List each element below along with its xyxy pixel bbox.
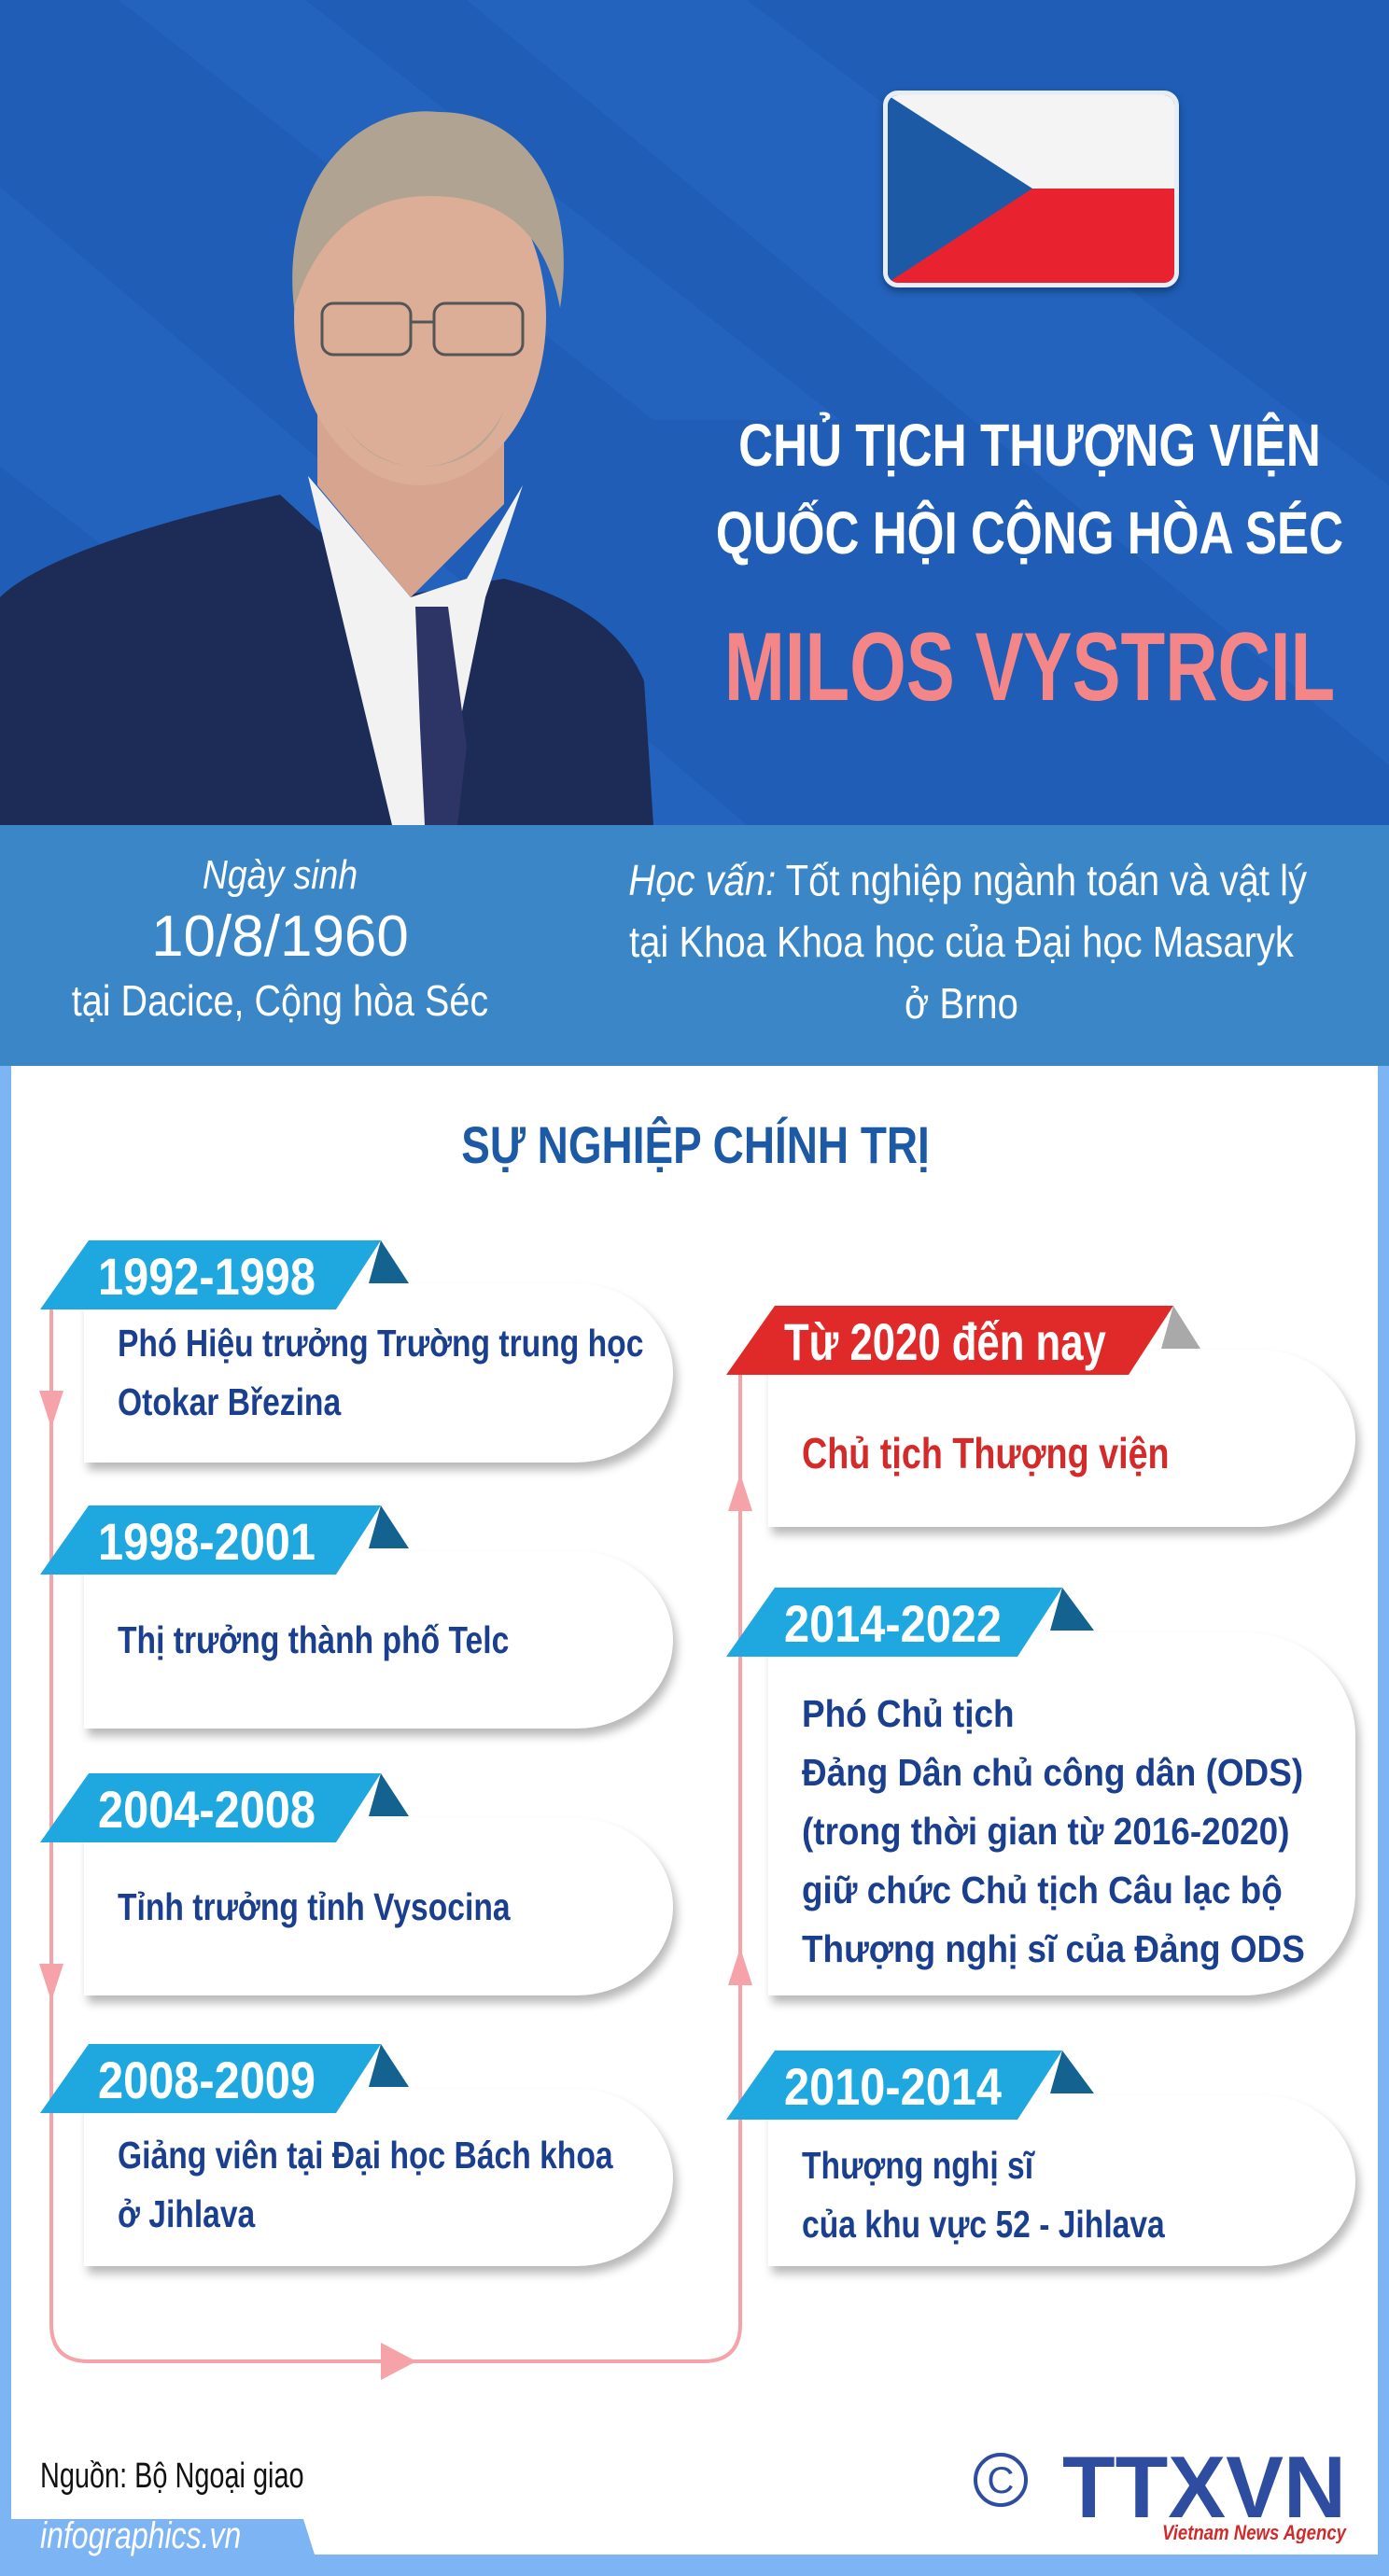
card 2010-2014: Thượng nghị sĩ	[802, 2144, 1033, 2187]
tag 2014-2022	[726, 1588, 1094, 1657]
card 2014-2022	[768, 1632, 1355, 1995]
card 1992-1998	[84, 1283, 673, 1463]
card 1992-1998: Otokar Březina	[118, 1380, 341, 1423]
card from 2020: Chủ tịch Thượng viện	[802, 1429, 1170, 1477]
birth info: Ngày sinh	[203, 852, 358, 898]
card 2008-2009: ở Jihlava	[118, 2192, 255, 2235]
education: ở Brno	[905, 979, 1018, 1028]
title: CHỦ TỊCH THƯỢNG VIỆN	[738, 412, 1321, 479]
tag 1992-1998	[40, 1240, 409, 1309]
logo TTXVN: C	[988, 2460, 1014, 2501]
card 1998-2001: Thị trưởng thành phố Telc	[118, 1618, 509, 1661]
tag 2010-2014: 2010-2014	[784, 2057, 1002, 2116]
tag 2014-2022: 2014-2022	[784, 1594, 1002, 1653]
flag	[883, 91, 1179, 287]
card 2014-2022: giữ chức Chủ tịch Câu lạc bộ	[802, 1869, 1283, 1911]
education: Học vấn: Tốt nghiệp ngành toán và vật lý	[628, 856, 1307, 904]
card 2004-2008	[84, 1818, 673, 1995]
title	[716, 412, 1343, 567]
card 2014-2022: Đảng Dân chủ công dân (ODS)	[802, 1751, 1303, 1794]
tag from 2020 (red)	[726, 1306, 1200, 1375]
section heading: SỰ NGHIỆP CHÍNH TRỊ	[461, 1115, 930, 1174]
card 2010-2014: của khu vực 52 - Jihlava	[802, 2203, 1165, 2246]
website tab	[11, 2515, 315, 2556]
name: MILOS VYSTRCIL	[724, 613, 1335, 721]
title: QUỐC HỘI CỘNG HÒA SÉC	[716, 499, 1343, 567]
logo TTXVN	[974, 2450, 1347, 2543]
education: tại Khoa Khoa học của Đại học Masaryk	[629, 917, 1294, 966]
tag 2004-2008: 2004-2008	[98, 1780, 316, 1839]
tag 2010-2014	[726, 2051, 1094, 2120]
card from 2020	[768, 1350, 1355, 1527]
card 2004-2008: Tỉnh trưởng tỉnh Vysocina	[118, 1885, 511, 1928]
card 2014-2022: (trong thời gian từ 2016-2020)	[802, 1810, 1289, 1853]
tag 1998-2001: 1998-2001	[98, 1512, 316, 1571]
tag 1998-2001	[40, 1505, 409, 1575]
tag 2004-2008	[40, 1773, 409, 1842]
card 1992-1998: Phó Hiệu trưởng Trường trung học	[118, 1322, 643, 1365]
tag 2008-2009: 2008-2009	[98, 2051, 316, 2109]
education	[628, 856, 1307, 1028]
card 1998-2001	[84, 1551, 673, 1729]
info band	[0, 825, 1389, 1066]
portrait photo	[0, 111, 653, 825]
tag from 2020 (red): Từ 2020 đến nay	[784, 1312, 1106, 1371]
card 2008-2009: Giảng viên tại Đại học Bách khoa	[118, 2134, 613, 2177]
header background	[0, 0, 1389, 825]
birth info	[72, 852, 488, 1025]
source: Nguồn: Bộ Ngoại giao	[40, 2457, 304, 2496]
website tab: infographics.vn	[40, 2515, 241, 2556]
main white panel	[11, 1066, 1378, 2555]
birth info: tại Dacice, Cộng hòa Séc	[72, 976, 488, 1025]
birth info: 10/8/1960	[151, 904, 409, 969]
tag 1992-1998: 1992-1998	[98, 1247, 316, 1306]
tag 2008-2009	[40, 2044, 409, 2113]
card 2014-2022: Phó Chủ tịch	[802, 1692, 1015, 1735]
card 2008-2009	[84, 2089, 673, 2266]
card 2010-2014	[768, 2095, 1355, 2266]
card 2014-2022: Thượng nghị sĩ của Đảng ODS	[802, 1927, 1305, 1970]
